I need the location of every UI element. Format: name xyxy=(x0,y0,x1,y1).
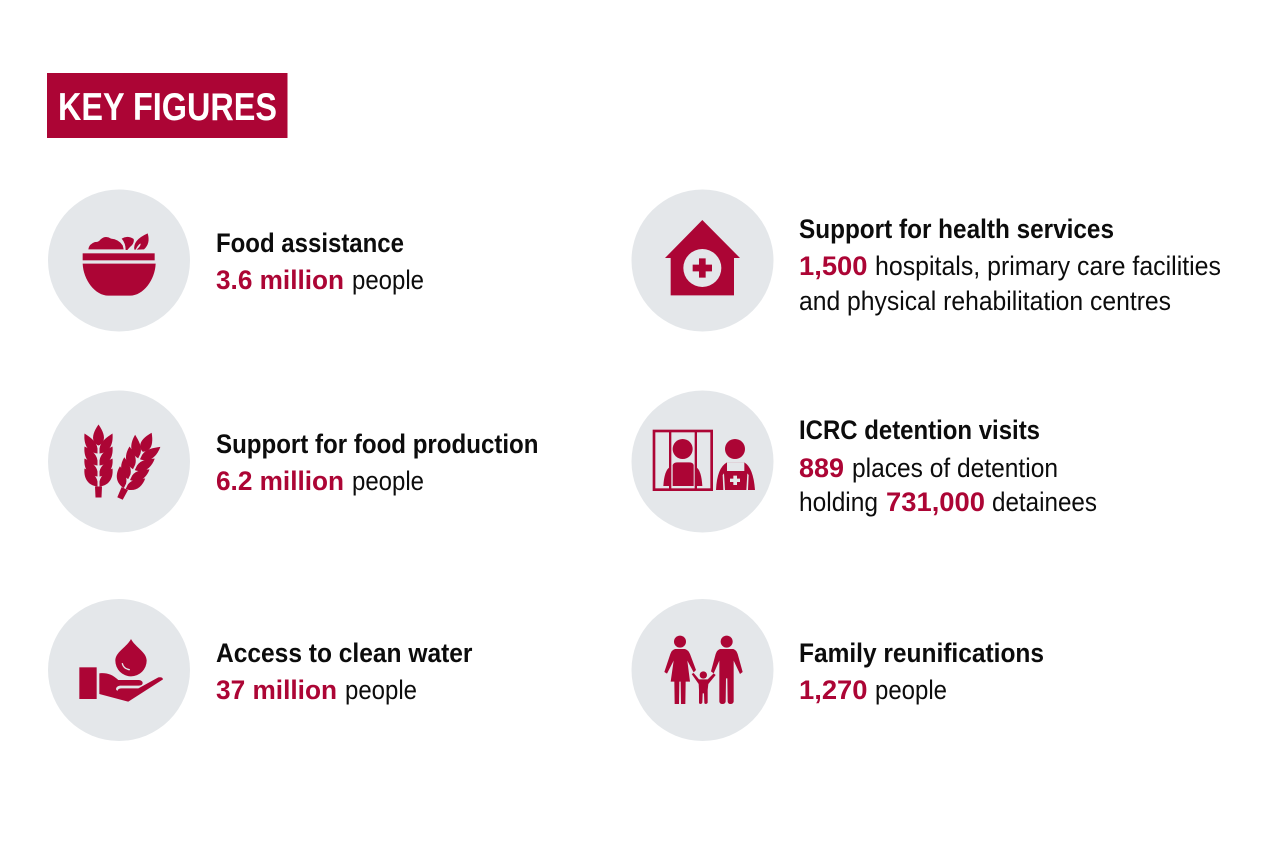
panel: health services xyxy=(632,190,1221,332)
text: food production: 6.2 million xyxy=(216,466,344,496)
text: health services: and physical rehabilitation centres xyxy=(799,286,1171,316)
text: food assistance: people xyxy=(352,265,424,295)
text: health services: Support for health services xyxy=(799,214,1114,244)
icon: wheat ears xyxy=(48,390,190,532)
text: detention visits xyxy=(799,415,1097,517)
text: clean water: people xyxy=(345,675,417,705)
text: food assistance: 3.6 million xyxy=(216,265,344,295)
panel: family reunifications xyxy=(632,599,1044,741)
text: detention visits: 731,000 xyxy=(886,487,985,517)
icon: hand and water drop xyxy=(48,599,190,741)
text: family reunifications: people xyxy=(875,675,947,705)
text: family reunifications xyxy=(799,638,1044,705)
panel: food production xyxy=(48,390,538,532)
text: detention visits: ICRC detention visits xyxy=(799,415,1040,445)
icon: health house xyxy=(632,190,774,332)
text: food assistance: Food assistance xyxy=(216,228,404,258)
icon: family xyxy=(632,599,774,741)
text: clean water: Access to clean water xyxy=(216,638,473,668)
icon: detainee behind bars and visitor xyxy=(632,390,774,532)
text: food assistance xyxy=(216,228,424,295)
text: detention visits: holding xyxy=(799,487,878,517)
text: family reunifications: 1,270 xyxy=(799,675,868,705)
title: KEY FIGURES xyxy=(47,73,288,138)
panel: clean water xyxy=(48,599,473,741)
panel: food assistance xyxy=(48,190,424,332)
title: KEY FIGURES: KEY FIGURES xyxy=(58,86,277,129)
text: health services: hospitals, primary care facilities xyxy=(875,251,1221,281)
text: detention visits: places of detention xyxy=(852,453,1058,483)
text: food production: Support for food production xyxy=(216,429,538,459)
text: food production: people xyxy=(352,466,424,496)
text: food production xyxy=(216,429,538,496)
panel: detention visits xyxy=(632,390,1097,532)
icon: salad bowl xyxy=(48,190,190,332)
text: family reunifications: Family reunifications xyxy=(799,638,1044,668)
text: health services: 1,500 xyxy=(799,251,868,281)
text: clean water: 37 million xyxy=(216,675,337,705)
text: detention visits: detainees xyxy=(992,487,1097,517)
text: detention visits: 889 xyxy=(799,453,844,483)
text: health services xyxy=(799,214,1221,316)
text: clean water xyxy=(216,638,473,705)
